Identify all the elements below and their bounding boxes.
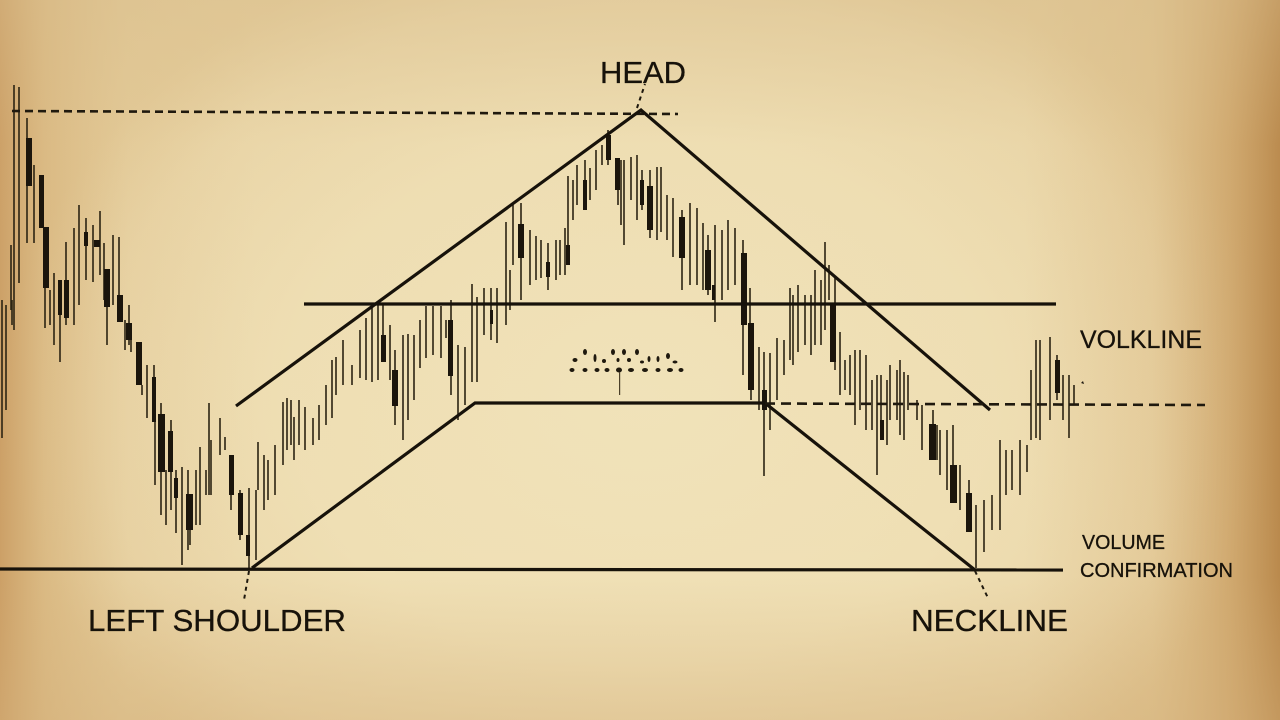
label: neckline: NECKLINE [911, 603, 1068, 638]
candle wicks [2, 85, 1074, 568]
label: volume line: VOLKLINE [1080, 326, 1202, 354]
candle bodies [26, 135, 1084, 556]
volume dot cluster [570, 349, 684, 395]
head trend lines [236, 110, 990, 410]
label: left shoulder: LEFT SHOULDER [88, 603, 346, 638]
label: volume confirmation [1080, 532, 1233, 582]
head peak pointer [637, 84, 645, 108]
left shoulder pointer [244, 571, 249, 600]
candlestick chart [2, 85, 1084, 568]
upper horizontal level [304, 302, 1056, 306]
label: head: HEAD [600, 55, 686, 90]
dashed volume line [765, 404, 1205, 405]
neckline base [0, 569, 1063, 570]
resistance dashed line [12, 111, 678, 114]
neckline pointer [975, 571, 988, 598]
label: volume confirmation: VOLUME [1082, 532, 1165, 554]
label: volume confirmation: CONFIRMATION [1080, 560, 1233, 582]
lower trapezoid lines [252, 403, 975, 570]
